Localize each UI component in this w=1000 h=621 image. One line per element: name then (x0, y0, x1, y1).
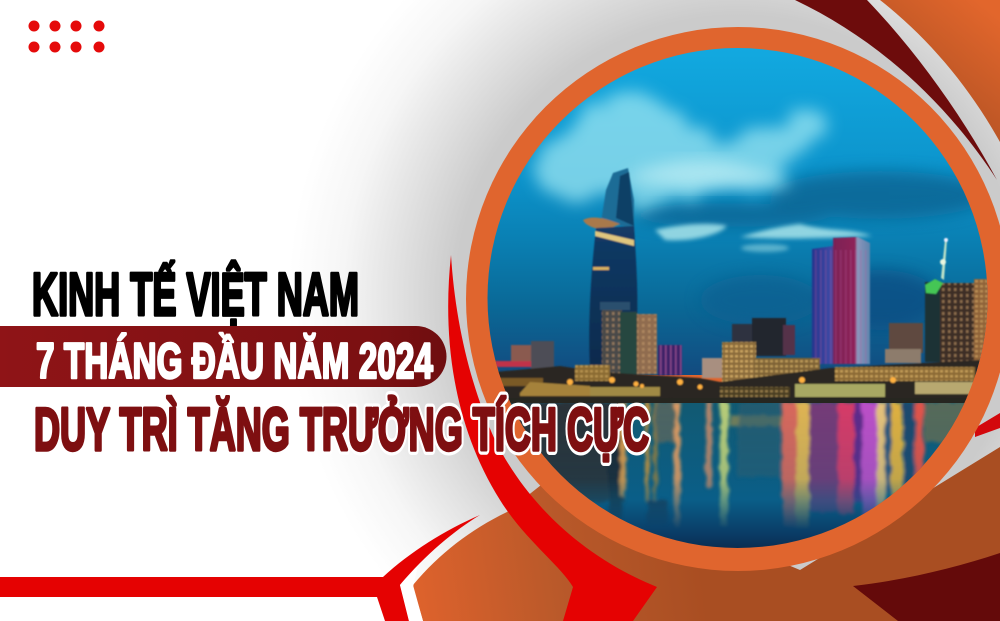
top-right maroon crescent (795, 0, 997, 180)
title line 3 (34, 396, 649, 463)
orange ring (466, 27, 1000, 571)
bright clouds (530, 85, 820, 205)
thin clouds (655, 224, 872, 252)
title line 1: KINH TẾ VIỆT NAM (32, 261, 359, 328)
low-rise block (722, 342, 756, 384)
white strip beside bottom shape (400, 566, 423, 621)
shoreline dark line (508, 398, 966, 403)
title pill (0, 326, 446, 389)
purple-lit tower (812, 237, 870, 364)
water reflections (490, 402, 970, 530)
river (510, 402, 965, 548)
decorative dots (28, 20, 104, 52)
Bitexco tower (583, 168, 637, 370)
title line 2: 7 THÁNG ĐẦU NĂM 2024 (36, 333, 433, 389)
red swoosh around circle (448, 255, 657, 621)
dark cloud band (630, 171, 990, 330)
bottom-right maroon wedge (853, 553, 1000, 621)
riverbank with lights (495, 360, 990, 402)
bottom brown shape (413, 447, 1000, 621)
sky (480, 40, 1000, 375)
right red accent (975, 413, 1000, 437)
skyline (495, 168, 990, 402)
right tower group (889, 323, 923, 353)
bottom red band with flare (0, 515, 480, 621)
mid office blocks (602, 310, 622, 375)
cloud highlight (625, 160, 785, 188)
top-right orange corner (880, 0, 1000, 142)
city photo (480, 40, 1000, 552)
